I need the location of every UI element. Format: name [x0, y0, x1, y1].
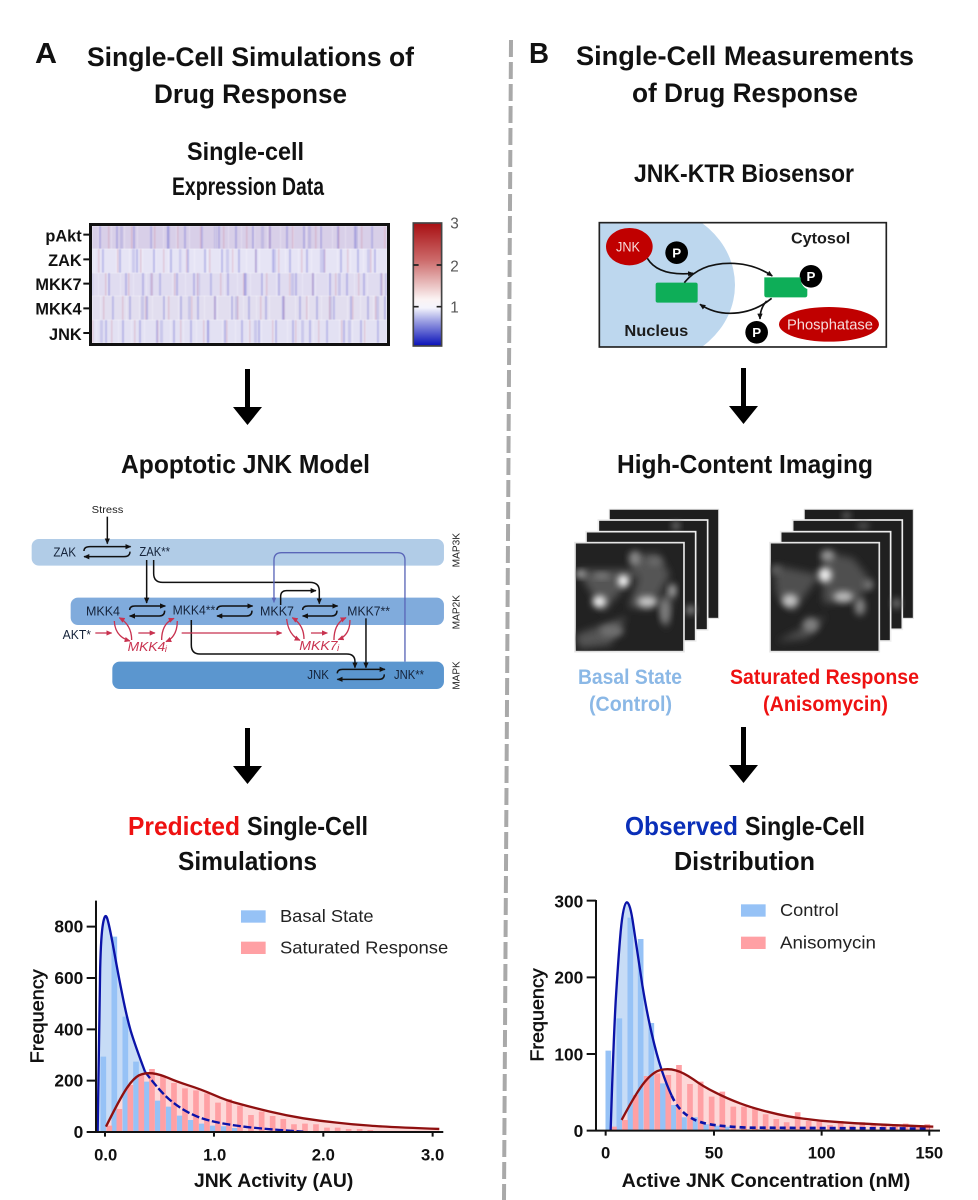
heading: single-cell measurements: [576, 41, 914, 108]
species labels: MKK4: [86, 604, 120, 618]
legend: Anisomycin: [780, 933, 876, 953]
heading: predicted simulations: Predicted: [128, 811, 240, 841]
heading: single-cell simulations: Single-Cell Simulations of: [87, 42, 415, 72]
pathway diagram: [32, 505, 462, 690]
chart: predicted distribution: 3.0: [421, 1145, 444, 1164]
species labels: ZAK**: [139, 545, 170, 559]
phosphate groups: P: [752, 325, 761, 340]
compartment labels: Cytosol: [791, 231, 850, 248]
axis numbers: 0: [574, 1121, 583, 1141]
heading: observed distribution: [625, 811, 865, 876]
nucleus: [600, 224, 735, 346]
band: MAPK: [112, 662, 444, 689]
band: MAP2K: [71, 598, 444, 625]
curve fills: [611, 902, 747, 1131]
axis numbers: 800: [54, 917, 83, 937]
heading: apoptotic JNK model: Apoptotic JNK Model: [121, 449, 370, 479]
phosphatase: [779, 307, 879, 342]
chart: predicted distribution: 1.0: [203, 1145, 226, 1164]
reaction arrows: [84, 517, 385, 679]
colour bar: 3: [450, 215, 459, 232]
arrow: imaging to distribution: [729, 727, 758, 783]
species labels: JNK: [307, 668, 329, 682]
AKT inhibition arrows: [95, 618, 350, 642]
inhibitor labels: MKK4ᵢ: [128, 640, 167, 654]
axis numbers: [554, 891, 583, 1141]
panel letter A: A: [35, 38, 57, 70]
arrow: biosensor to imaging: [729, 368, 758, 424]
label: saturated response: [730, 666, 919, 716]
biosensor schematic: [598, 222, 888, 348]
heatmap row labels: MKK7: [35, 276, 82, 294]
compartment labels: [624, 231, 850, 340]
tier labels: MAP3K: [451, 533, 462, 567]
axis titles: Active JNK Concentration (nM): [622, 1171, 910, 1192]
chart: observed distribution: Frequency: [526, 968, 547, 1062]
row: MKK4: [92, 296, 387, 320]
heading: biosensor: JNK-KTR Biosensor: [634, 160, 854, 188]
blue bars: [103, 937, 235, 1132]
axis titles: JNK Activity (AU): [194, 1171, 353, 1192]
colour bar: 2: [450, 259, 459, 276]
row: ZAK: [92, 249, 387, 273]
red bars: [109, 1069, 370, 1132]
axes: [587, 900, 940, 1136]
heading: observed distribution: Distribution: [674, 846, 815, 876]
curves: [98, 916, 439, 1132]
colour bar: [413, 215, 459, 346]
heading: predicted simulations: [128, 811, 368, 876]
heatmap row labels: [35, 227, 89, 344]
tier labels: MAP2K: [451, 595, 462, 629]
phosphate groups: [665, 241, 822, 344]
heatmap row labels: pAkt: [45, 227, 82, 245]
label: basal state: Basal State: [578, 666, 682, 689]
arrow: expression to model: [233, 369, 262, 425]
phosphate groups: P: [807, 269, 816, 284]
chart: observed distribution: [526, 891, 943, 1192]
chart: observed distribution: 150: [915, 1143, 943, 1162]
blue bars: [608, 918, 727, 1131]
divider between panels: [504, 40, 511, 1200]
axis numbers: 0: [74, 1122, 83, 1142]
label: basal state: [578, 666, 682, 716]
heading: predicted simulations: Single-Cell: [247, 811, 368, 841]
heading: single-cell measurements: of Drug Response: [632, 78, 858, 108]
axes: [87, 901, 443, 1137]
row: JNK: [92, 320, 387, 343]
feedback arrow: [274, 553, 405, 662]
chart: observed distribution: 50: [705, 1143, 723, 1162]
species labels: AKT*: [63, 628, 91, 642]
heading: single-cell simulations: Drug Response: [154, 79, 347, 109]
axis numbers: 300: [554, 891, 583, 911]
inhibitor labels: [128, 639, 340, 654]
row: MKK7: [92, 273, 387, 296]
stack: saturated response: [770, 509, 913, 652]
species labels: [53, 505, 424, 682]
heatmap: [89, 223, 390, 346]
axis numbers: 600: [54, 968, 83, 988]
legend: [241, 906, 448, 957]
chart: predicted distribution: [26, 901, 448, 1192]
species labels: MKK7**: [347, 604, 390, 618]
chart: predicted distribution: Frequency: [26, 969, 47, 1063]
phosphatase: Phosphatase: [787, 317, 873, 333]
heatmap row labels: MKK4: [35, 301, 82, 319]
tier labels: MAPK: [451, 661, 462, 690]
transport arrows: [647, 258, 772, 319]
heatmap row labels: ZAK: [48, 252, 82, 270]
red bars: [614, 1065, 927, 1131]
chart: predicted distribution: 0.0: [94, 1145, 117, 1164]
heading: predicted simulations: Simulations: [178, 846, 317, 876]
chart: observed distribution: 0: [601, 1143, 610, 1162]
heading: expression data: [172, 138, 325, 201]
legend: [741, 900, 876, 953]
legend: Control: [780, 900, 839, 920]
axis numbers: 200: [554, 968, 583, 988]
curve fills: [98, 916, 303, 1132]
green KTR boxes: [656, 283, 698, 303]
species labels: MKK4**: [173, 604, 215, 618]
row: pAkt: [92, 226, 387, 249]
species labels: MKK7: [260, 604, 294, 618]
microscopy image stacks: [575, 509, 913, 652]
colour bar: 1: [450, 299, 459, 316]
heading: observed distribution: Single-Cell: [745, 811, 865, 841]
JNK node: JNK: [616, 239, 641, 255]
species labels: ZAK: [53, 546, 76, 560]
chart: predicted distribution: 2.0: [312, 1145, 335, 1164]
axis numbers: 400: [54, 1019, 83, 1039]
tier labels: [451, 533, 462, 690]
heading: high-content imaging: High-Content Imaging: [617, 449, 873, 479]
axis numbers: 100: [554, 1044, 583, 1064]
heading: single-cell measurements: Single-Cell Measurements: [576, 41, 914, 71]
heading: single-cell simulations: [87, 42, 415, 109]
curves: [611, 902, 933, 1131]
species labels: Stress: [92, 505, 123, 516]
legend: Saturated Response: [280, 937, 448, 957]
compartment labels: Nucleus: [624, 323, 688, 340]
panel letter B: B: [529, 38, 549, 70]
heading: observed distribution: Observed: [625, 811, 738, 841]
heading: expression data: Single-cell: [187, 138, 304, 166]
heading: expression data: Expression Data: [172, 173, 325, 201]
axis numbers: 200: [54, 1071, 83, 1091]
phosphate groups: P: [672, 245, 681, 260]
heatmap row labels: JNK: [49, 326, 82, 344]
axis numbers: [54, 917, 83, 1142]
label: basal state: (Control): [589, 693, 672, 716]
label: saturated response: (Anisomycin): [763, 693, 888, 716]
stack: basal state: [575, 509, 719, 652]
legend: Basal State: [280, 906, 374, 926]
species labels: JNK**: [394, 668, 424, 682]
chart: observed distribution: 100: [808, 1143, 836, 1162]
inhibitor labels: MKK7ᵢ: [299, 639, 340, 653]
label: saturated response: Saturated Response: [730, 666, 919, 689]
JNK node: [606, 228, 653, 265]
frame: [599, 223, 886, 347]
band: MAP3K: [32, 539, 444, 566]
arrow: model to simulation: [233, 728, 262, 784]
